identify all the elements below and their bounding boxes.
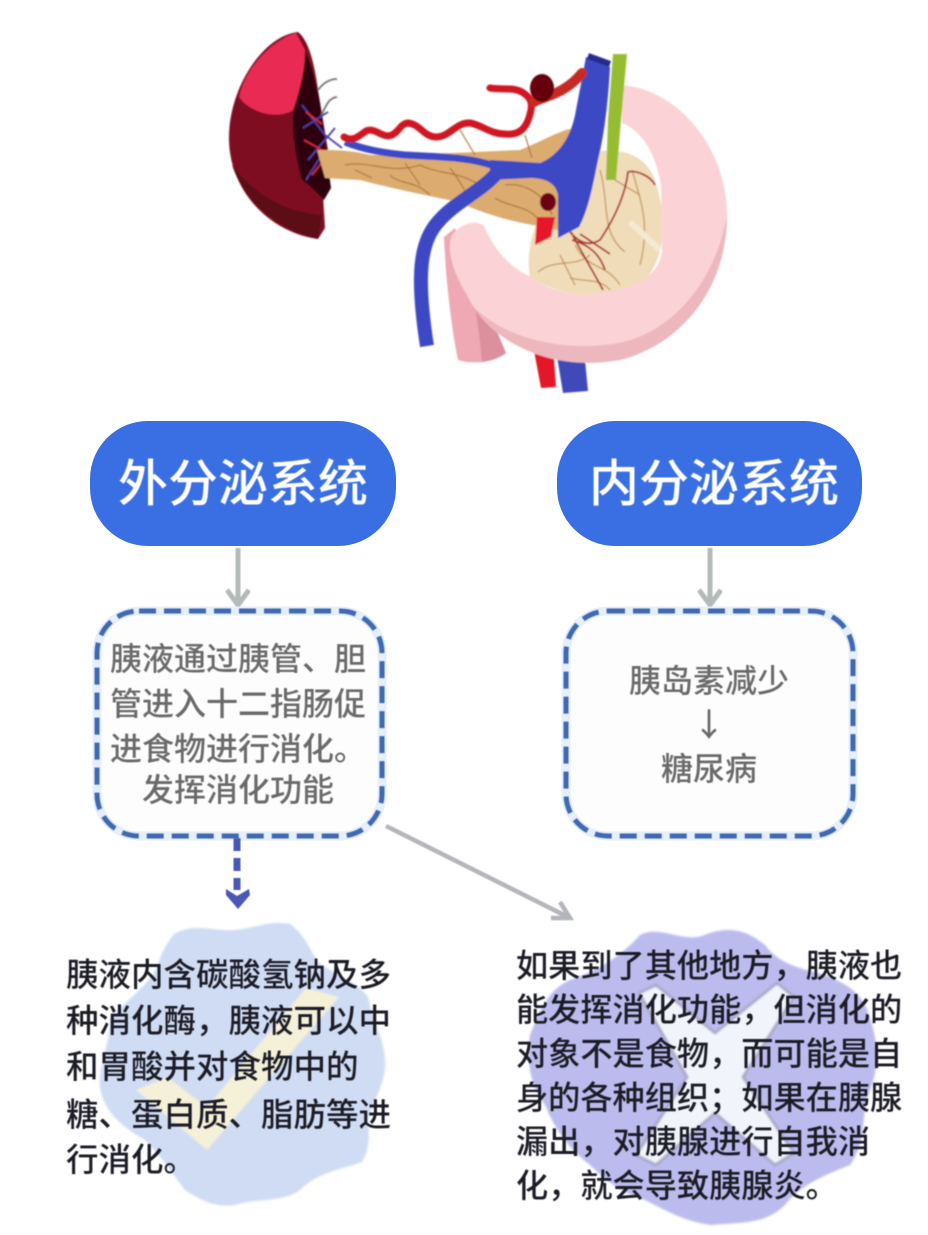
text: normal digestion: 和胃酸并对食物中的 [66, 1049, 359, 1085]
text: self-digestion: 化，就会导致胰腺炎。 [516, 1168, 838, 1204]
panel: endocrine description box [566, 611, 853, 836]
icon: check mark [136, 988, 339, 1150]
red artery segment and dark circle [535, 193, 556, 245]
pancreatic vessel and white duct [570, 172, 660, 290]
text: exocrine description: 胰液通过胰管、胆 [110, 641, 366, 677]
blob: lavender background [529, 930, 877, 1225]
text: self-digestion: 能发挥消化功能，但消化的 [516, 992, 902, 1028]
duodenum tail [444, 228, 506, 362]
blue vein system [345, 56, 610, 346]
blob: pale blue background [100, 923, 385, 1206]
text: self-digestion: 漏出，对胰腺进行自我消 [516, 1124, 870, 1160]
illustration: pancreas, spleen and duodenum [229, 32, 727, 393]
text: endocrine description [629, 663, 789, 787]
spleen hilum vessels [302, 79, 342, 180]
header pill: exocrine system [90, 421, 396, 546]
text: self-digestion: 身的各种组织；如果在胰腺 [516, 1080, 902, 1116]
text: normal digestion: 胰液内含碳酸氢钠及多 [66, 957, 391, 993]
text: exocrine description: 进食物进行消化。 [110, 731, 366, 767]
header pill: exocrine system: 外分泌系统 [118, 456, 368, 512]
pancreas body and tail [317, 128, 585, 232]
spleen [229, 32, 331, 239]
arrow: endocrine header to box [699, 548, 721, 605]
text: self-digestion [516, 948, 902, 1204]
pancreas head [529, 151, 663, 295]
header pill: endocrine system [557, 421, 862, 546]
dark arterial node [530, 74, 554, 102]
text: self-digestion: 如果到了其他地方，胰液也 [516, 948, 902, 984]
text: endocrine description: 糖尿病 [661, 751, 757, 787]
arrow: dashed to correct outcome [226, 838, 250, 909]
green bile duct [606, 54, 627, 180]
text: endocrine description: ↓ [693, 700, 725, 746]
panel: exocrine description box [97, 611, 382, 836]
panel: normal digestion with check [66, 923, 391, 1206]
text: normal digestion: 糖、蛋白质、脂肪等进 [66, 1097, 391, 1133]
header pill: endocrine system: 内分泌系统 [589, 456, 839, 512]
text: exocrine description: 发挥消化功能 [142, 772, 334, 808]
arrow: diagonal to wrong outcome [386, 826, 570, 918]
text: self-digestion: 对象不是食物，而可能是自 [516, 1036, 902, 1072]
text: exocrine description [110, 641, 366, 808]
bottom aorta and vena cava tubes [533, 345, 588, 393]
duodenum [450, 85, 727, 363]
panel: self-digestion with cross [516, 930, 902, 1225]
icon: cross mark [636, 983, 794, 1165]
text: endocrine description: 胰岛素减少 [629, 663, 789, 699]
text: normal digestion [66, 957, 391, 1178]
pancreas ducts and small veins [345, 130, 645, 290]
text: normal digestion: 种消化酶，胰液可以中 [66, 1003, 391, 1039]
wavy splenic artery [344, 73, 582, 139]
text: exocrine description: 管进入十二指肠促 [110, 686, 366, 722]
arrow: exocrine header to box [227, 548, 249, 605]
text: normal digestion: 行消化。 [66, 1142, 196, 1178]
